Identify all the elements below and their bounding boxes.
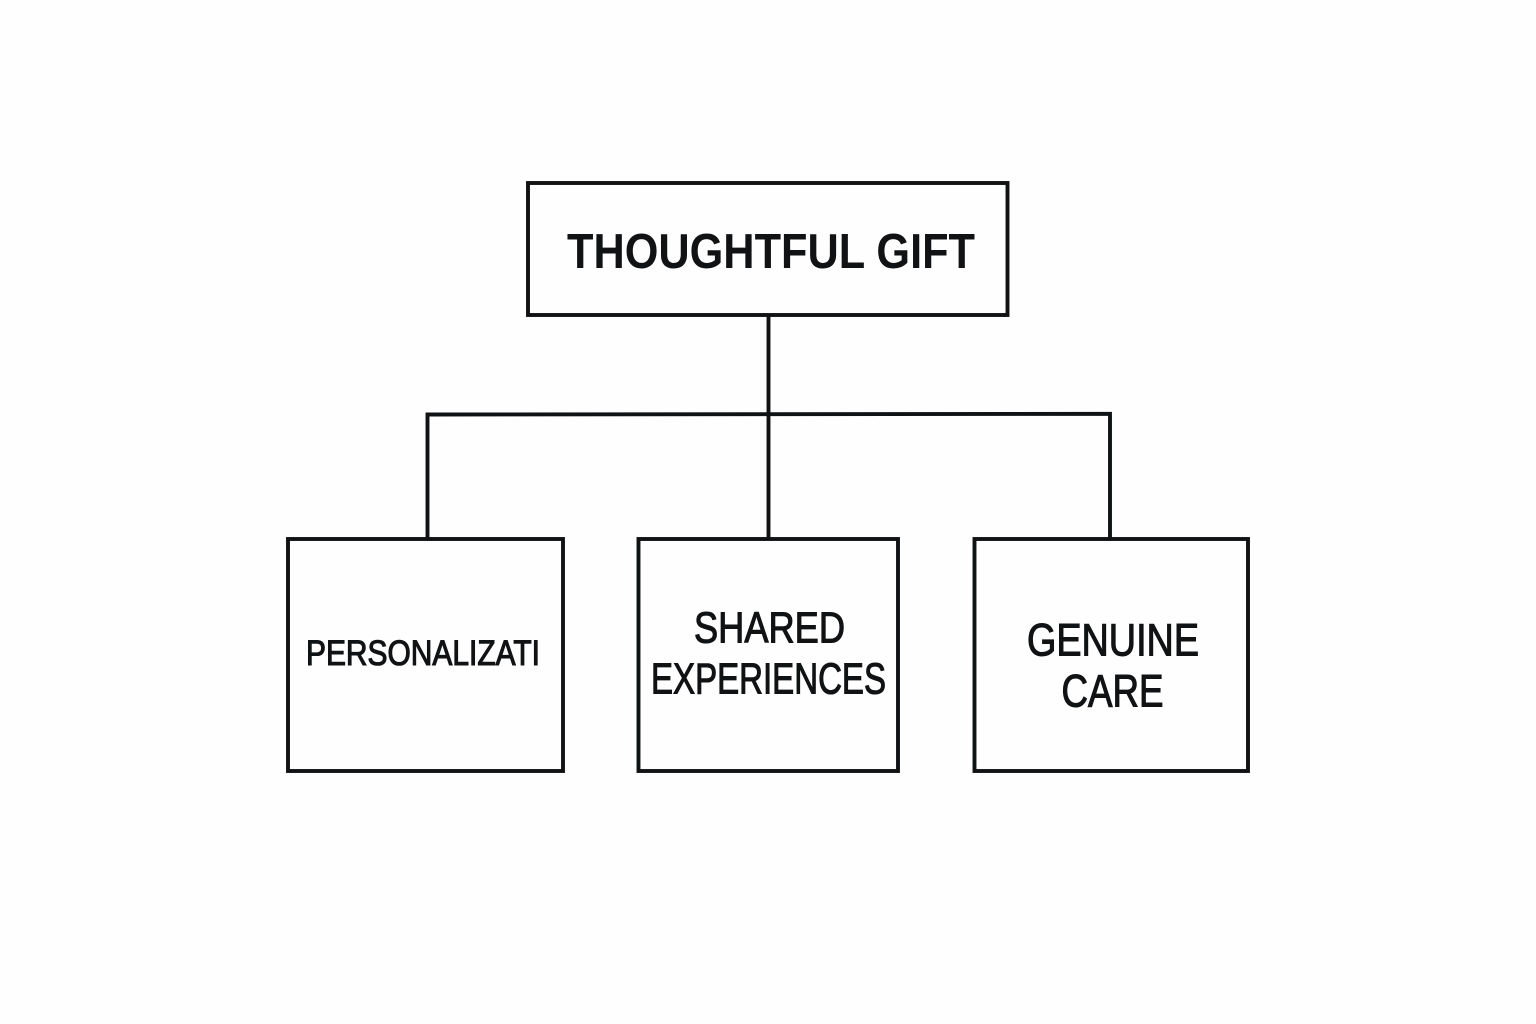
box: thoughtful gift bbox=[528, 183, 1008, 315]
connector lines bbox=[428, 316, 1110, 538]
box: personalization bbox=[288, 539, 563, 771]
box: genuine care bbox=[974, 539, 1248, 771]
box: genuine care: GENUINE bbox=[1027, 614, 1199, 666]
box: thoughtful gift: THOUGHTFUL GIFT bbox=[567, 225, 975, 279]
box: shared experiences: SHARED bbox=[694, 604, 845, 652]
box: genuine care: CARE bbox=[1062, 666, 1164, 716]
box: shared experiences bbox=[638, 539, 898, 771]
box: personalization: PERSONALIZATI bbox=[306, 634, 540, 673]
org chart diagram bbox=[288, 183, 1248, 771]
box: shared experiences: EXPERIENCES bbox=[651, 654, 886, 704]
